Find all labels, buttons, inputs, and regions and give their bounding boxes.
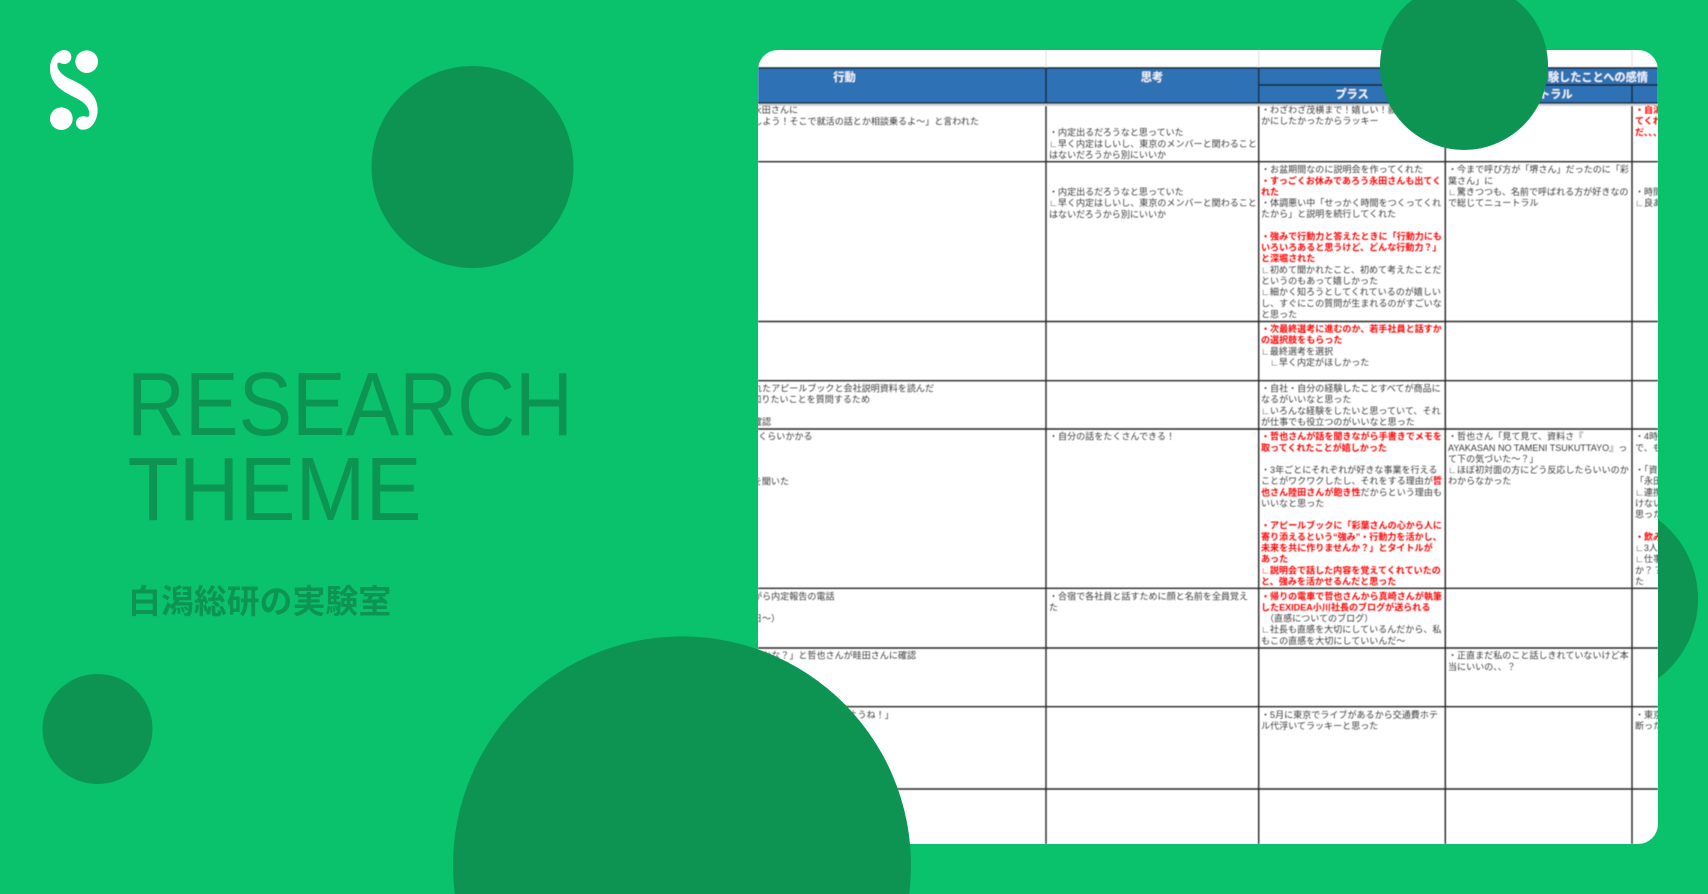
column: マイナス text (clipped): ・4時 xyxy=(1635,432,1658,442)
column: ニュートラル text: AYAKASAN NO TAMENI TSUKUTTAYO』っ xyxy=(1448,443,1627,453)
column: プラス text: 未来を共に作りませんか？」とタイトルが xyxy=(1261,542,1433,553)
column: マイナス text (clipped): た xyxy=(1635,576,1644,586)
column: マイナス text (clipped): 「永田 xyxy=(1635,475,1662,486)
column: プラス text: ・アピールブックに「彩葉さんの心から人に xyxy=(1261,520,1442,531)
table header labels xyxy=(833,70,1648,101)
column: マイナス text (clipped): ・飲み xyxy=(1635,531,1662,542)
column: プラス text: ・3年ごとにそれぞれが好きな事業を行える xyxy=(1261,464,1437,475)
column: プラス text: ∟説明会で話した内容を覚えてくれていたの xyxy=(1261,564,1441,575)
column: プラス text: ・次最終選考に進むのか、若手社員と話すか xyxy=(1261,323,1442,334)
column: プラス text: 也さん陸田さんが飽き性だからという理由も xyxy=(1261,487,1442,497)
column: ニュートラル text: で総じてニュートラル xyxy=(1448,197,1538,208)
column: プラス text: ・強みで行動力と答えたときに「行動力にも xyxy=(1261,230,1442,241)
decorative circle: top over card xyxy=(1380,0,1548,150)
column: 行動 text: 永田さんに xyxy=(753,104,798,115)
column: プラス text: ∟最終選考を選択 xyxy=(1261,345,1333,356)
table header labels: 思考 xyxy=(1141,71,1163,84)
column: 思考 text: ・内定出るだろうなと思っていた xyxy=(1049,186,1184,197)
column: 思考 text: た xyxy=(1049,602,1058,612)
column: 行動 text: しようね！」 xyxy=(839,710,894,720)
column: 行動 text xyxy=(744,104,979,720)
icon: S logo xyxy=(50,50,98,130)
column: プラス text: と、強みを活かせるんだと思った xyxy=(1261,575,1396,586)
column: マイナス text (clipped): ∟良あ xyxy=(1635,197,1662,208)
column: マイナス text (clipped): だ、、、 xyxy=(1635,127,1662,137)
column: マイナス text (clipped): か？？ xyxy=(1635,565,1662,575)
column: 行動 text: のかな？」と哲也さんが畦田さんに確認 xyxy=(753,650,916,661)
column: プラス text: の選択肢をもらった xyxy=(1261,334,1342,345)
column: 思考 text: ∟早く内定はしいし、東京のメンバーと関わること xyxy=(1049,197,1257,208)
column: プラス text: ・哲也さんが話を聞きながら手書きでメモを xyxy=(1261,431,1442,442)
column: ニュートラル text: て下の気づいた〜？」 xyxy=(1448,453,1538,464)
column: プラス text: いいなと思った xyxy=(1261,498,1324,508)
column: マイナス text (clipped): ・「資 xyxy=(1635,464,1658,475)
column: ニュートラル text: ・哲也さん「見て見て、資料さ『 xyxy=(1448,431,1583,442)
column: マイナス text (clipped): で、も xyxy=(1635,443,1662,453)
column: ニュートラル text: 当にいいの、、？ xyxy=(1448,661,1516,672)
column: プラス text xyxy=(1261,104,1442,731)
column: プラス text: 寄り添えるという“強み”・行動力を活かし、 xyxy=(1261,531,1442,542)
column: プラス text: ・自社・自分の経験したことすべてが商品に xyxy=(1261,382,1441,394)
column: マイナス text (clipped): ∟仕事 xyxy=(1635,553,1662,564)
column: プラス text: たから」と説明を続行してくれた xyxy=(1261,208,1396,219)
column: プラス text: ∟社長も直感を大切にしているんだから、私 xyxy=(1261,624,1441,635)
column: プラス text: いろいろあると思うけど、どんな行動力？」 xyxy=(1261,242,1441,253)
column: プラス text: し、すぐにこの質問が生まれるのがすごいな xyxy=(1261,297,1442,308)
column: プラス text: なるがいいなと思った xyxy=(1261,394,1351,405)
column: プラス text: したEXIDEA小川社長のブログが送られる xyxy=(1261,601,1430,612)
column: マイナス text (clipped): ∟連携 xyxy=(1635,486,1662,497)
column: プラス text: ことがワクワクしたし、それをする理由が哲 xyxy=(1261,476,1442,486)
decorative circle: bottom large over card xyxy=(453,636,911,894)
panel: spreadsheet screenshot card xyxy=(744,50,1662,844)
decorative circle: right, behind card xyxy=(1500,500,1698,698)
column: ニュートラル text: わからなかった xyxy=(1448,476,1511,486)
column: 行動 text: しよう！そこで就活の話とか相談乗るよ〜」と言われた xyxy=(753,116,979,126)
table header labels: プラス xyxy=(1335,88,1369,101)
decorative circle: lower left small xyxy=(42,674,152,784)
title xyxy=(127,355,573,540)
table grid xyxy=(758,106,1658,844)
column: ニュートラル text: ・正直まだ私のこと話しきれていないけど本 xyxy=(1448,650,1629,661)
column: プラス text: （直感についてのブログ） xyxy=(1265,613,1373,624)
column: 行動 text: されたアピールブックと会社説明資料を読んだ xyxy=(744,382,934,394)
column: プラス text: ・すっごくお休みであろう永田さんも出てく xyxy=(1261,175,1441,186)
column: プラス text: というのもあって嬉しかった xyxy=(1261,275,1378,286)
column: 思考 text: はないだろうから別にいいか xyxy=(1049,150,1166,160)
column: 行動 text: くらいかかる xyxy=(758,432,812,442)
column: プラス text: れた xyxy=(1261,187,1279,197)
column: 思考 text: ・自分の話をたくさんできる！ xyxy=(1049,431,1175,442)
column: プラス text: ・わざわざ茂横まで！嬉しい！就 xyxy=(1261,104,1397,115)
column: マイナス text (clipped): けない xyxy=(1635,498,1662,508)
column: プラス text: ∟いろんな経験をしたいと思っていて、それ xyxy=(1261,405,1441,416)
title: THEME xyxy=(128,440,422,540)
subtitle: 白潟総研の実験室 xyxy=(128,583,391,620)
decorative circle: upper left large xyxy=(372,66,574,268)
column: プラス text: と思った xyxy=(1261,309,1297,319)
column: マイナス text (clipped): てくれ xyxy=(1635,116,1662,126)
column: 行動 text: を聞いた xyxy=(753,476,789,486)
column: マイナス text (clipped) xyxy=(1634,104,1658,730)
table header labels: ニュートラル xyxy=(1505,88,1573,101)
column: 思考 text: ・内定出るだろうなと思っていた xyxy=(1049,127,1184,138)
column: 思考 text: はないだろうから別にいいか xyxy=(1049,209,1166,219)
column: プラス text: が仕事でも役立つのがいいなと思った xyxy=(1261,416,1415,427)
column: プラス text: ∟早く内定がほしかった xyxy=(1270,356,1369,367)
column: プラス text: ∟細かく知ろうとしてくれているのが嬉しい xyxy=(1261,286,1441,297)
column: 思考 text: ∟早く内定はしいし、東京のメンバーと関わること xyxy=(1049,138,1257,149)
column: 行動 text: 日〜） xyxy=(753,613,780,623)
column: マイナス text (clipped): ・自潟 xyxy=(1635,104,1662,115)
column: 行動 text: 知りたいことを質問するため xyxy=(752,394,870,405)
table header band xyxy=(758,50,1658,106)
column: 思考 text: ・合宿で各社員と話すために顔と名前を全員覚え xyxy=(1049,590,1248,601)
column: ニュートラル text: ∟ほぼ初対面の方にどう反応したらいいのか xyxy=(1448,464,1629,475)
column: プラス text: かにしたかったからラッキー xyxy=(1261,116,1379,126)
column: 行動 text: 確認 xyxy=(753,416,771,427)
column: プラス text: と深堀された xyxy=(1261,253,1315,264)
column: ニュートラル text: ・今まで呼び方が「堺さん」だったのに「彩 xyxy=(1448,164,1629,175)
column: 行動 text: がら内定報告の電話 xyxy=(753,590,834,601)
column: プラス text: 取ってくれたことが嬉しかった xyxy=(1261,442,1387,453)
column: マイナス text (clipped): ・東京 xyxy=(1635,709,1662,720)
table header labels: 験したことへの感情 xyxy=(1548,70,1648,84)
column: プラス text: ・帰りの電車で哲也さんから真崎さんが執筆 xyxy=(1261,590,1442,601)
column: ニュートラル text xyxy=(1448,164,1629,672)
column: プラス text: ・体調悪い中「せっかく時間をつくってくれ xyxy=(1261,197,1441,208)
table header labels: 行動 xyxy=(833,70,856,84)
column: マイナス text (clipped): 断った xyxy=(1635,720,1662,731)
column: プラス text: ル代浮いてラッキーと思った xyxy=(1261,720,1378,731)
column: プラス text: あった xyxy=(1261,554,1288,564)
column: プラス text: ・5月に東京でライブがあるから交通費ホテ xyxy=(1261,709,1438,720)
title: RESEARCH xyxy=(127,355,573,455)
column: マイナス text (clipped): ・時間 xyxy=(1635,187,1662,197)
column: プラス text: もこの直感を大切にしていいんだ〜 xyxy=(1261,635,1405,646)
column: プラス text: ∟初めて聞かれたこと、初めて考えたことだ xyxy=(1261,264,1441,275)
column: 思考 text xyxy=(1049,127,1257,612)
column: ニュートラル text: 葉さん」に xyxy=(1448,175,1493,186)
column: プラス text: ・お盆期間なのに説明会を作ってくれた xyxy=(1261,164,1423,175)
column: マイナス text (clipped): 思った xyxy=(1635,510,1662,520)
column: ニュートラル text: ∟驚きつつも、名前で呼ばれる方が好きなの xyxy=(1448,186,1628,197)
column: マイナス text (clipped): ∟3人 xyxy=(1635,543,1658,553)
